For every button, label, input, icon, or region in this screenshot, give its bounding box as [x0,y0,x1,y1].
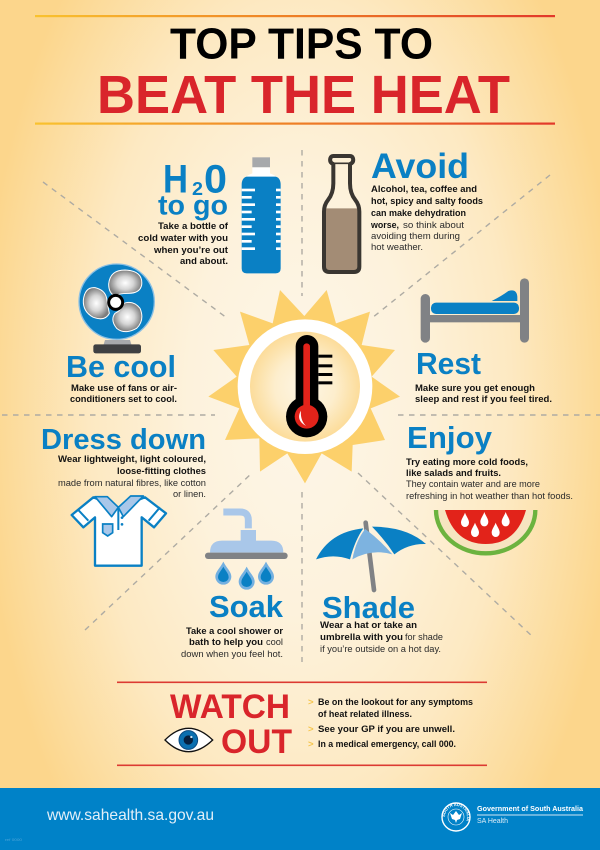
text: H2O tip: cold water with you [138,233,228,244]
text: government of South Australia: SA Health [477,816,508,825]
icon: umbrella [316,523,426,590]
text: Soak tip: Take a cool shower or [186,626,283,637]
text: Avoid tip: so think about [403,220,464,231]
icon: eye [165,728,213,752]
title: BEAT THE HEAT [97,65,510,125]
footer [0,788,600,850]
text: Shade tip: for shade [405,632,443,643]
text: H2O tip: and about. [180,256,228,267]
heading: Rest: Rest [416,346,481,381]
text: watch out bullets: > [308,739,314,750]
text: Avoid tip: worse, [370,220,399,231]
panel: Soak [181,512,288,660]
text: Shade tip [320,620,443,655]
heading: watch out [170,688,292,761]
icon: water bottle [242,157,281,273]
text: Enjoy tip: Try eating more cold foods, [406,457,528,468]
text: watch out bullets: In a medical emergency, call 000. [318,739,456,750]
text: Soak tip: cool [266,637,283,648]
text: watch out bullets: > [308,724,314,735]
text: Shade tip: umbrella with you [320,632,403,643]
heading: Avoid: Avoid [371,147,469,186]
heading: Dress down: Dress down [41,424,206,456]
panel: watch out [117,682,487,766]
heading: Soak: Soak [209,589,284,624]
title [35,15,555,125]
text: Dress down tip: loose-fitting clothes [117,466,206,477]
text: government of South Australia: Government of South Australia [477,804,584,813]
icon: watermelon [436,510,535,553]
text: watch out bullets [308,697,473,750]
text: watch out bullets: > [308,697,314,708]
text: Enjoy tip: They contain water and are more [406,479,540,490]
icon: bottle [324,156,359,272]
text: Soak tip: down when you feel hot. [181,649,283,660]
panel: H2O to go [138,157,281,273]
panel: Enjoy [406,420,573,553]
text: Be cool tip: conditioners set to cool. [70,394,177,405]
text: Dress down tip: made from natural fibres, like cotton [58,478,206,489]
text: Shade tip: Wear a hat or take an [320,620,417,631]
panel: Avoid [324,147,483,272]
panel: Shade [316,523,443,655]
heading: Enjoy: Enjoy [407,420,493,455]
text: Avoid tip: hot weather. [371,242,423,253]
text: Rest tip: Make sure you get enough [415,383,535,394]
heading: watch out: WATCH [170,688,290,726]
text: Avoid tip: avoiding them during [371,231,460,242]
heading: H2O [158,158,228,220]
heading: H2O: H [163,158,188,202]
text: Dress down tip [58,454,206,500]
text: Enjoy tip [406,457,573,502]
text: Be cool tip: Make use of fans or air- [71,383,177,394]
text: Soak tip: bath to help you [189,637,263,648]
text: Dress down tip: or linen. [173,489,206,500]
text: Avoid tip: hot, spicy and salty foods [371,196,483,207]
text: Rest tip: sleep and rest if you feel tired. [415,394,552,405]
icon: shirt [72,496,166,566]
heading: H2O: 0 [204,158,227,202]
website url: www.sahealth.sa.gov.au [46,807,214,824]
text: Avoid tip: can make dehydration [371,208,466,219]
panel: Rest [415,278,552,405]
text: Avoid tip [370,184,483,253]
logo: South Australia crest: SOUTH AUSTRALIA [442,804,470,821]
heading: watch out: OUT [221,723,292,761]
heading: Shade: Shade [322,590,415,625]
text: H2O tip: Take a bottle of [158,221,229,232]
text: Avoid tip: Alcohol, tea, coffee and [371,184,477,195]
text: watch out bullets: See your GP if you are unwell. [318,724,455,735]
title: TOP TIPS TO [170,20,433,68]
text: Be cool tip [70,383,177,405]
panel: Be cool [66,264,177,405]
icon: shower [205,512,288,590]
text: watch out bullets: of heat related illness. [318,709,412,720]
text: Soak tip [181,626,283,660]
text: Enjoy tip: like salads and fruits. [406,468,501,479]
text: Dress down tip: Wear lightweight, light coloured, [58,454,206,465]
text: H2O tip [138,221,229,267]
text: H2O tip: when you’re out [153,245,229,256]
text: Rest tip [415,383,552,405]
print reference: ref 0000 [5,838,22,842]
text: watch out bullets: Be on the lookout for any symptoms [318,697,473,708]
text: Enjoy tip: refreshing in hot weather than hot foods. [406,491,573,502]
text: Shade tip: if you’re outside on a hot day. [320,644,441,655]
heading: H2O: to go [158,190,228,220]
text: government of South Australia [477,804,584,825]
panel: Dress down [41,424,206,566]
logo: South Australia crest [441,802,471,832]
icon: sun with thermometer [208,290,400,483]
heading: H2O: 2 [192,179,203,199]
icon: bed [421,278,529,343]
icon: fan [79,264,154,353]
heading: Be cool: Be cool [66,349,176,384]
